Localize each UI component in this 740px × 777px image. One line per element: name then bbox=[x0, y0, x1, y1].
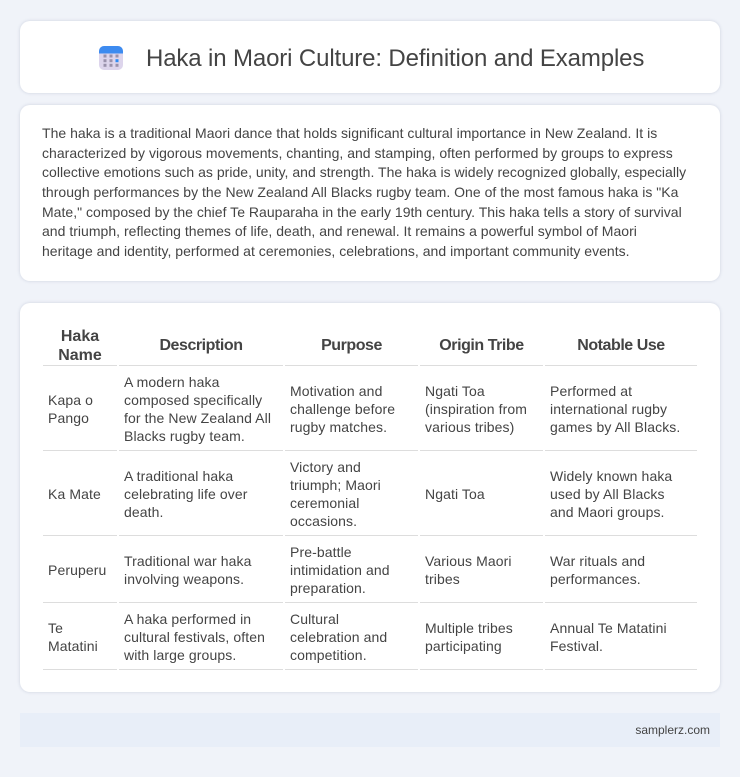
table: haka types: composed specifically bbox=[124, 392, 262, 408]
text block: introduction: and triumph, reflecting themes of life, death, and renewal. It remains a powerful symbol of Maori bbox=[42, 223, 637, 239]
table: haka types: celebration and bbox=[290, 628, 387, 644]
table: haka types: Peruperu bbox=[48, 562, 106, 578]
table: haka types: Victory and bbox=[290, 458, 361, 474]
table: haka types: Cultural bbox=[290, 610, 339, 626]
table: haka types: celebrating life over bbox=[124, 486, 248, 502]
panel: introduction bbox=[20, 105, 720, 281]
table: haka types: Ngati Toa bbox=[425, 382, 485, 398]
table: haka types: (inspiration from bbox=[425, 400, 527, 416]
table: haka types: with large groups. bbox=[124, 646, 236, 662]
table: haka types: Name bbox=[58, 347, 102, 364]
table: haka types bbox=[43, 328, 697, 670]
table: haka types: Notable Use bbox=[577, 336, 665, 354]
table: haka types: Description bbox=[159, 336, 243, 354]
table: haka types: death. bbox=[124, 504, 164, 520]
text block: introduction: through performances by the New Zealand All Blacks rugby team. One of the most famous haka is "Ka bbox=[42, 184, 678, 200]
table: haka types: Matatini bbox=[48, 638, 98, 654]
table: haka types: Ka Mate bbox=[48, 486, 101, 502]
text block: introduction: The haka is a traditional Maori dance that holds significant cultural importance in New Zealand. It is bbox=[42, 125, 657, 141]
footer: samplerz.com bbox=[635, 723, 710, 737]
text block: introduction bbox=[42, 125, 686, 259]
table: haka types: games by All Blacks. bbox=[550, 418, 680, 434]
table: haka types: War rituals and bbox=[550, 552, 645, 568]
text block: introduction: Mate," composed by the chief Te Rauparaha in the early 19th century. This haka tells a story of survival bbox=[42, 204, 682, 220]
title: Haka in Maori Culture: Definition and Examples bbox=[146, 45, 644, 72]
icon: calendar bbox=[99, 46, 123, 70]
text block: introduction: heritage and identity, performed at ceremonies, celebrations, and important community events. bbox=[42, 243, 630, 259]
table: haka types: Motivation and bbox=[290, 382, 382, 398]
table: haka types: A haka performed in bbox=[124, 610, 251, 626]
table: haka types: Pre-battle bbox=[290, 544, 352, 560]
table: haka types: participating bbox=[425, 638, 502, 654]
table: haka types: Haka bbox=[61, 328, 99, 345]
footer bbox=[20, 713, 720, 747]
table: haka types: international rugby bbox=[550, 400, 667, 416]
table: haka types: involving weapons. bbox=[124, 570, 244, 586]
table: haka types: Widely known haka bbox=[550, 468, 672, 484]
table: haka types: occasions. bbox=[290, 512, 357, 528]
table: haka types: Blacks rugby team. bbox=[124, 428, 245, 444]
table: haka types: Purpose bbox=[321, 336, 382, 354]
table: haka types: Various Maori bbox=[425, 552, 512, 568]
table: haka types: Multiple tribes bbox=[425, 620, 513, 636]
table: haka types: and Maori groups. bbox=[550, 504, 665, 520]
table: haka types: for the New Zealand All bbox=[124, 410, 271, 426]
table: haka types: intimidation and bbox=[290, 562, 390, 578]
table: haka types: tribes bbox=[425, 570, 460, 586]
table: haka types: challenge before bbox=[290, 400, 395, 416]
table: haka types: competition. bbox=[290, 646, 367, 662]
table: haka types: triumph; Maori bbox=[290, 476, 381, 492]
table: haka types: Ngati Toa bbox=[425, 486, 485, 502]
text block: introduction: collective emotions such as pride, unity, and strength. The haka is widely recognized globally, especially bbox=[42, 164, 686, 180]
table: haka types: Performed at bbox=[550, 382, 632, 398]
text block: introduction: characterized by vigorous movements, chanting, and stamping, often performed by groups to express bbox=[42, 145, 673, 161]
table: haka types: ceremonial bbox=[290, 494, 359, 510]
table: haka types: performances. bbox=[550, 570, 641, 586]
table: haka types: Annual Te Matatini bbox=[550, 620, 667, 636]
table: haka types: rugby matches. bbox=[290, 418, 387, 434]
table: haka types: preparation. bbox=[290, 580, 366, 596]
panel: table card bbox=[20, 303, 720, 692]
table: haka types: Pango bbox=[48, 410, 89, 426]
title card bbox=[20, 21, 720, 93]
table: haka types: Te bbox=[48, 620, 63, 636]
table: haka types: Kapa o bbox=[48, 392, 93, 408]
table: haka types: A traditional haka bbox=[124, 468, 233, 484]
table: haka types: Festival. bbox=[550, 638, 603, 654]
table: haka types: A modern haka bbox=[124, 374, 219, 390]
table: haka types: Traditional war haka bbox=[124, 552, 252, 568]
table: haka types: Origin Tribe bbox=[439, 336, 524, 354]
table: haka types: used by All Blacks bbox=[550, 486, 665, 502]
table: haka types: various tribes) bbox=[425, 418, 514, 434]
table: haka types: cultural festivals, often bbox=[124, 628, 265, 644]
